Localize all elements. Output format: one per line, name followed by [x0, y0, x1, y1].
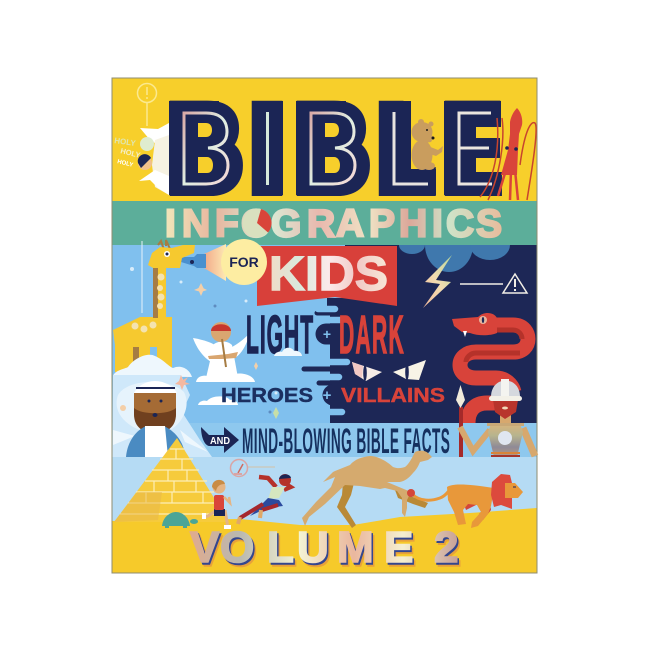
- icon: small cloud by LIGHT: [274, 348, 302, 356]
- icon: speedometer: [230, 460, 275, 476]
- icon: teddy bear on the L: [412, 119, 443, 170]
- heading: KIDS: KIDS: [269, 248, 388, 301]
- icon: angels singing holy: HOLY: [114, 136, 137, 148]
- panel: yellow desert ground: [112, 508, 536, 572]
- decoration: stars: [130, 267, 279, 419]
- heading: BIBLE: L: [379, 84, 432, 213]
- panel: sky background left: [112, 245, 536, 425]
- heading: VOLUME 2: VOLUME 2: [192, 525, 460, 574]
- panel: dark night background right: [327, 245, 536, 423]
- heading: DARK: DARK: [339, 304, 404, 365]
- icon: small cloud below angel: [198, 396, 238, 405]
- panel: teal title band: [112, 201, 536, 245]
- icon: angels singing holy: HOLY: [120, 146, 141, 160]
- icon: camel: [302, 451, 432, 528]
- heading: BIBLE: E: [445, 85, 499, 213]
- heading: AND arrow: AND: [210, 435, 230, 447]
- banner: red KIDS background: [257, 246, 397, 306]
- icon: red serpent: [452, 313, 528, 423]
- heading: BIBLE: B: [170, 83, 241, 213]
- panel: pale sky band: [112, 457, 536, 527]
- heading: MIND-BLOWING BIBLE FACTS: MIND-BLOWING BIBLE FACTS: [242, 421, 450, 461]
- icon: plus between HEROES and VILLAINS: +: [323, 387, 332, 404]
- heading: VOLUME 2: VOLUME 2: [193, 527, 461, 576]
- heading: LIGHT: LIGHT: [246, 304, 313, 365]
- icon: lion: [407, 474, 523, 528]
- line: white marker by giraffe: [141, 241, 143, 313]
- icon: telescope beam: [181, 244, 226, 281]
- icon: Moses in glowing cloud: [112, 375, 212, 457]
- panel: wavy light and dark boundary: [304, 309, 347, 420]
- icon: warrior with spear: [456, 379, 535, 457]
- icon: plus between LIGHT and DARK: +: [323, 326, 331, 342]
- heading: VILLAINS: VILLAINS: [341, 385, 445, 407]
- icon: giraffe: [113, 240, 195, 372]
- heading: INFOGRAPHICS: INFOGRAPHICS: [165, 202, 502, 246]
- icon: angel playing flute: [193, 322, 255, 382]
- icon: running boy: [202, 480, 231, 529]
- icon: storm cloud: [399, 245, 510, 272]
- heading: BIBLE: I: [252, 84, 282, 213]
- icon: turtle: [162, 512, 198, 528]
- heading: HEROES: HEROES: [221, 385, 313, 407]
- icon: pyramid: [114, 438, 229, 522]
- heading: VOLUME 2: VOLUME 2: [190, 523, 458, 572]
- panel: middle light blue band: [112, 423, 536, 457]
- panel: book cover background: [112, 78, 537, 573]
- icon: FOR circle badge: [221, 239, 267, 285]
- heading: BIBLE: B: [297, 83, 368, 213]
- icon: exclamation circle top left: [138, 84, 156, 126]
- icon: lightning bolt: [423, 255, 452, 308]
- icon: warning triangle with line: [460, 274, 527, 293]
- icon: red squid: [480, 108, 536, 200]
- icon: angels singing holy: HOLY: [117, 159, 134, 169]
- icon: angels singing holy: [114, 123, 169, 195]
- icon: cloud behind giraffe: [113, 355, 192, 377]
- heading: AND arrow: [201, 427, 239, 453]
- icon: sprinter: [238, 474, 291, 524]
- icon: FOR circle badge: FOR: [229, 254, 259, 270]
- icon: villain eyes: [352, 360, 426, 381]
- heading: BIBLE: [169, 83, 503, 213]
